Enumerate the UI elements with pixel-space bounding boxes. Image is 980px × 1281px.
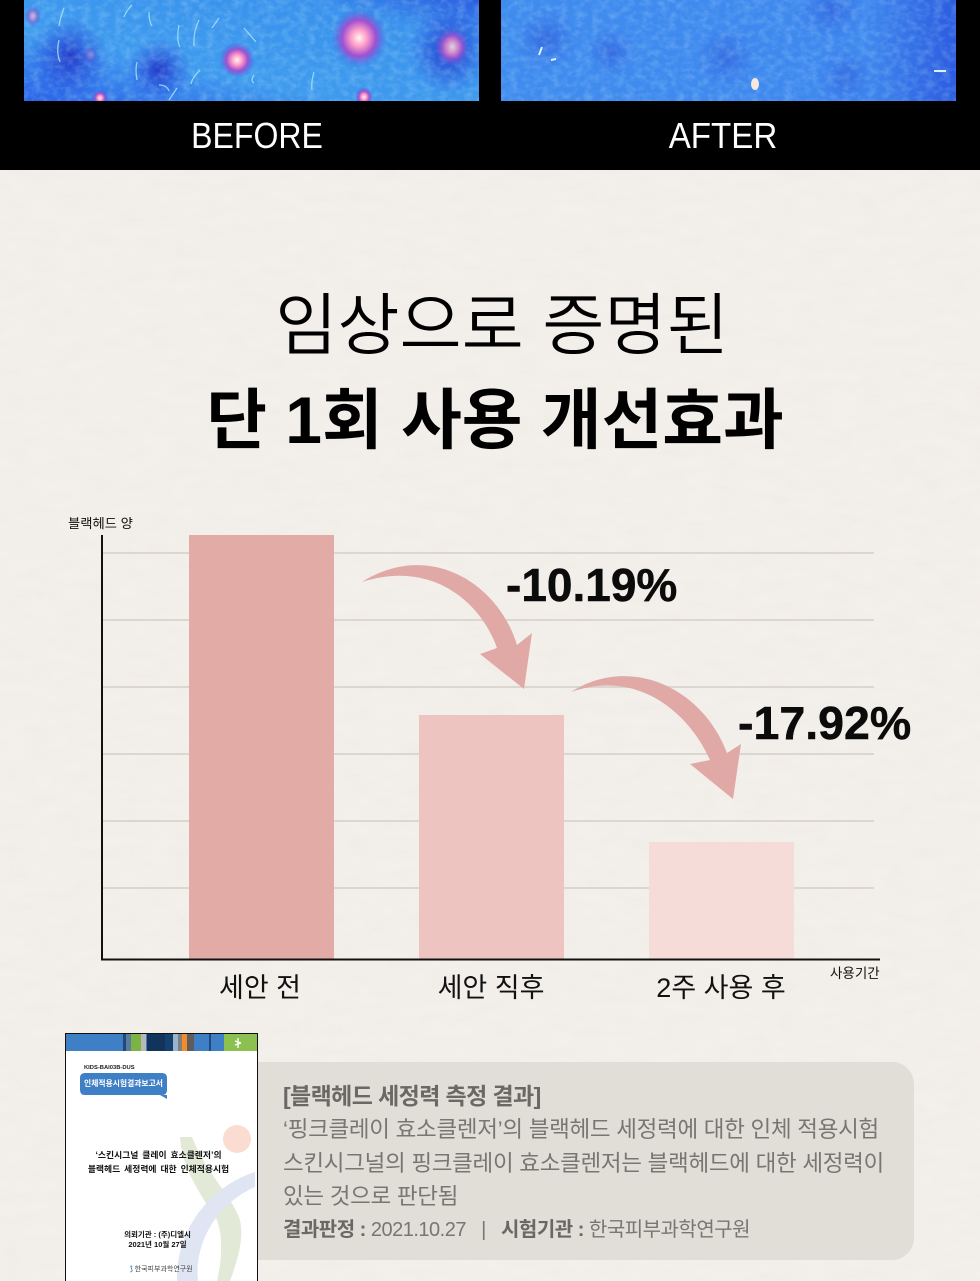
bar chart (68, 516, 911, 1003)
bar: right after cleansing (419, 715, 564, 959)
title (206, 289, 784, 457)
cover colour band (66, 1034, 257, 1051)
category: before cleansing: 세안 전 (219, 973, 301, 1003)
panel body text: 있는 것으로 판단됨 (283, 1184, 458, 1209)
panel heading: [블랙헤드 세정력 측정 결과] (283, 1083, 541, 1109)
photo header: before and after (0, 0, 980, 170)
title line 2: 단 1회 사용 개선효과 (206, 383, 784, 457)
cover client and date: 2021년 10월 27일 (128, 1240, 187, 1249)
photo: before skin scan (24, 0, 479, 101)
panel body text (283, 1117, 884, 1209)
cover tag text: 인체적용시험결과보고서 (84, 1079, 163, 1088)
x axis label: use period: 사용기간 (830, 966, 880, 981)
y axis label: 블랙헤드 양 (68, 516, 133, 531)
cover title: 블랙헤드 세정력에 대한 인체적용시험 (88, 1164, 229, 1174)
cover blue tag (80, 1073, 167, 1099)
photo: after skin scan (501, 0, 956, 101)
value: minus 10.19 percent: -10.19% (506, 559, 677, 611)
title line 1: 임상으로 증명된 (275, 289, 729, 364)
category: right after cleansing: 세안 직후 (438, 973, 544, 1003)
arrow: first decrease (362, 565, 532, 689)
cover institute logo: ⟆ 한국피부과학연구원 (130, 1266, 193, 1273)
axes (102, 535, 880, 960)
cover decoration (177, 1125, 255, 1281)
cover title: ‘스킨시그널 클레이 효소클렌저’의 (95, 1150, 222, 1160)
label: before: BEFORE (191, 115, 323, 156)
panel body text: ‘핑크클레이 효소클렌저’의 블랙헤드 세정력에 대한 인체 적용시험 (283, 1117, 879, 1142)
category: after 2 weeks: 2주 사용 후 (656, 973, 786, 1003)
cover client and date (124, 1230, 191, 1249)
cover client and date: 의뢰기관 : (주)디엘시 (124, 1230, 191, 1239)
cover report code: KIDS-BAI03B-DUS (84, 1065, 135, 1071)
bar: after 2 weeks (649, 842, 794, 959)
panel meta line: 결과판정 : 2021.10.27 | 시험기관 : 한국피부과학연구원 (283, 1219, 750, 1241)
arrow: second decrease (571, 676, 741, 799)
panel: result description (230, 1062, 914, 1260)
report cover document (65, 1033, 258, 1281)
label: after: AFTER (669, 115, 777, 156)
bar: before cleansing (189, 535, 334, 959)
panel body text: 스킨시그널의 핑크클레이 효소클렌저는 블랙헤드에 대한 세정력이 (283, 1150, 884, 1176)
cover title (88, 1150, 229, 1174)
value: minus 17.92 percent: -17.92% (738, 697, 911, 749)
